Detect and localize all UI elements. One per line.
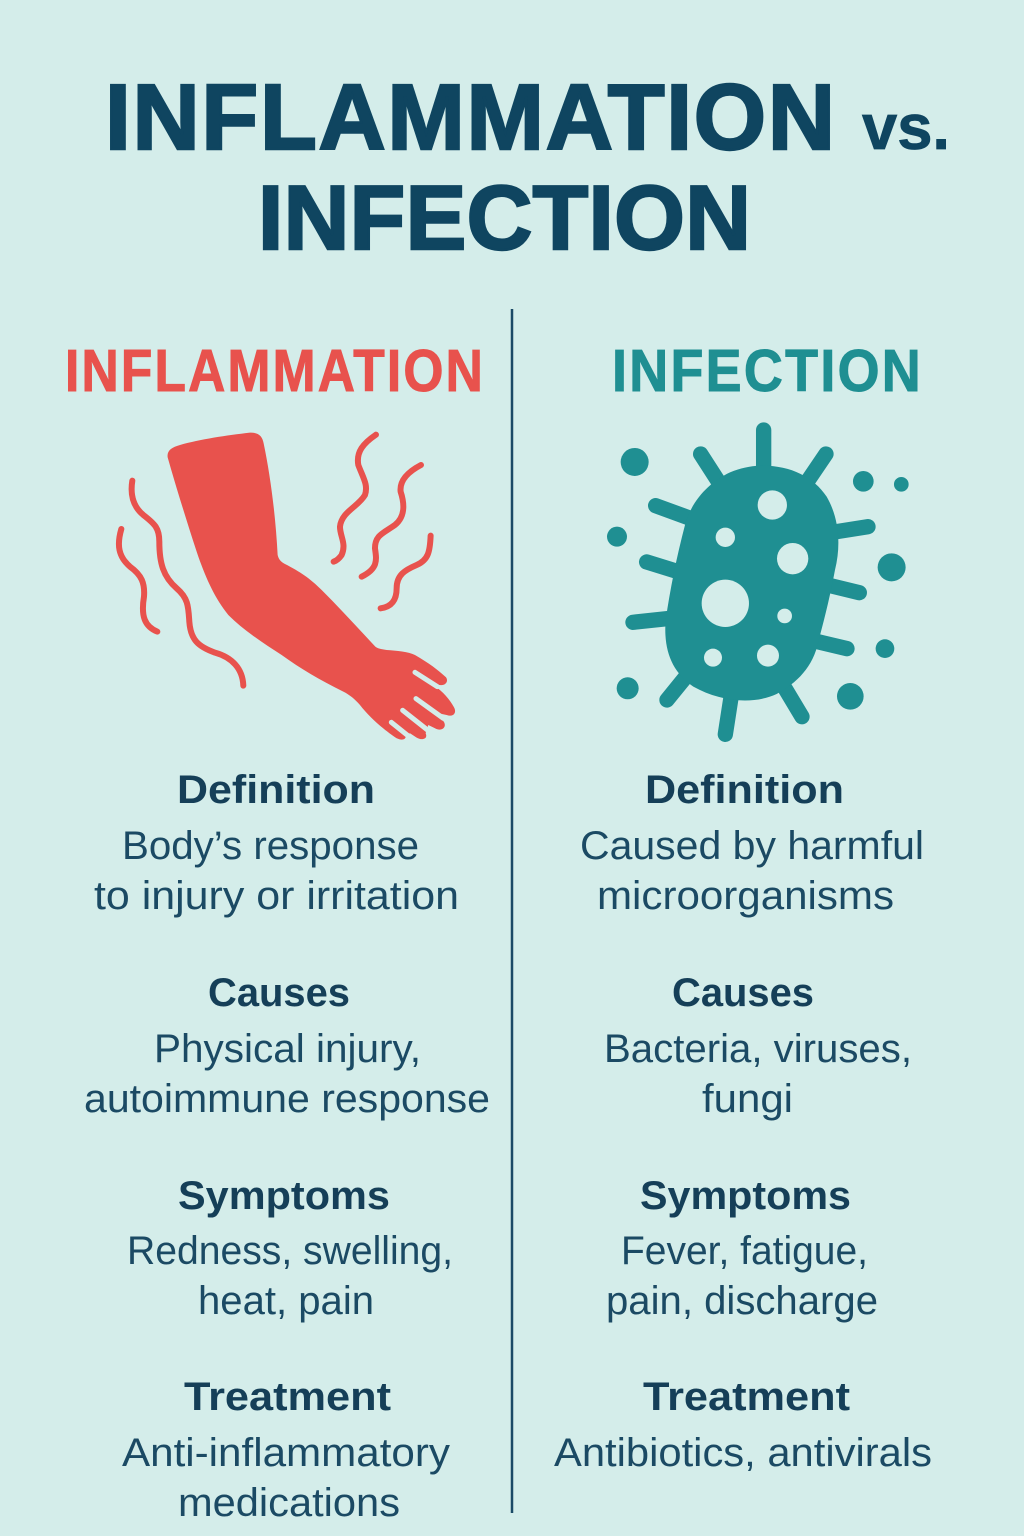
title xyxy=(105,65,950,269)
panel: inflammation xyxy=(65,338,490,1525)
block: inflammation causes: Physical injury, xyxy=(154,1027,421,1071)
title: vs. xyxy=(862,91,950,163)
block: inflammation symptoms: Symptoms xyxy=(178,1174,390,1218)
block: inflammation definition: Body’s response xyxy=(122,824,419,868)
block: infection causes: Causes xyxy=(672,971,814,1015)
title: INFLAMMATION xyxy=(105,65,835,169)
block: infection causes xyxy=(604,971,912,1121)
block: inflammation causes: Causes xyxy=(208,971,350,1015)
title: INFECTION xyxy=(258,168,751,269)
heading: inflammation: INFLAMMATION xyxy=(65,338,485,404)
block: infection treatment: Treatment xyxy=(643,1375,850,1419)
block: infection definition: microorganisms xyxy=(597,874,894,918)
block: inflammation symptoms: Redness, swelling, xyxy=(127,1229,453,1273)
panel: infection xyxy=(554,338,932,1475)
block: infection treatment xyxy=(554,1375,932,1475)
block: infection symptoms: Fever, fatigue, xyxy=(621,1229,868,1273)
heading: infection: INFECTION xyxy=(612,338,923,404)
block: infection symptoms: Symptoms xyxy=(640,1174,851,1218)
block: infection definition: Definition xyxy=(645,768,844,812)
block: infection symptoms: pain, discharge xyxy=(606,1279,878,1323)
block: infection definition: Caused by harmful xyxy=(580,824,924,868)
icon: pathogen xyxy=(607,430,909,734)
block: infection treatment: Antibiotics, antivirals xyxy=(554,1431,932,1475)
block: inflammation definition xyxy=(94,768,459,918)
block: inflammation treatment: Treatment xyxy=(184,1375,391,1419)
block: infection causes: fungi xyxy=(702,1077,793,1121)
block: inflammation treatment: medications xyxy=(178,1481,400,1525)
block: inflammation definition: to injury or irritation xyxy=(94,874,459,918)
block: inflammation treatment xyxy=(122,1375,450,1525)
block: infection definition xyxy=(580,768,924,918)
block: inflammation symptoms: heat, pain xyxy=(198,1279,374,1323)
block: inflammation causes xyxy=(84,971,490,1121)
block: inflammation symptoms xyxy=(127,1174,453,1323)
block: inflammation definition: Definition xyxy=(177,768,375,812)
block: inflammation causes: autoimmune response xyxy=(84,1077,490,1121)
block: infection symptoms xyxy=(606,1174,878,1323)
icon: inflamed arm xyxy=(119,433,455,740)
block: inflammation treatment: Anti-inflammatory xyxy=(122,1431,450,1475)
block: infection causes: Bacteria, viruses, xyxy=(604,1027,912,1071)
